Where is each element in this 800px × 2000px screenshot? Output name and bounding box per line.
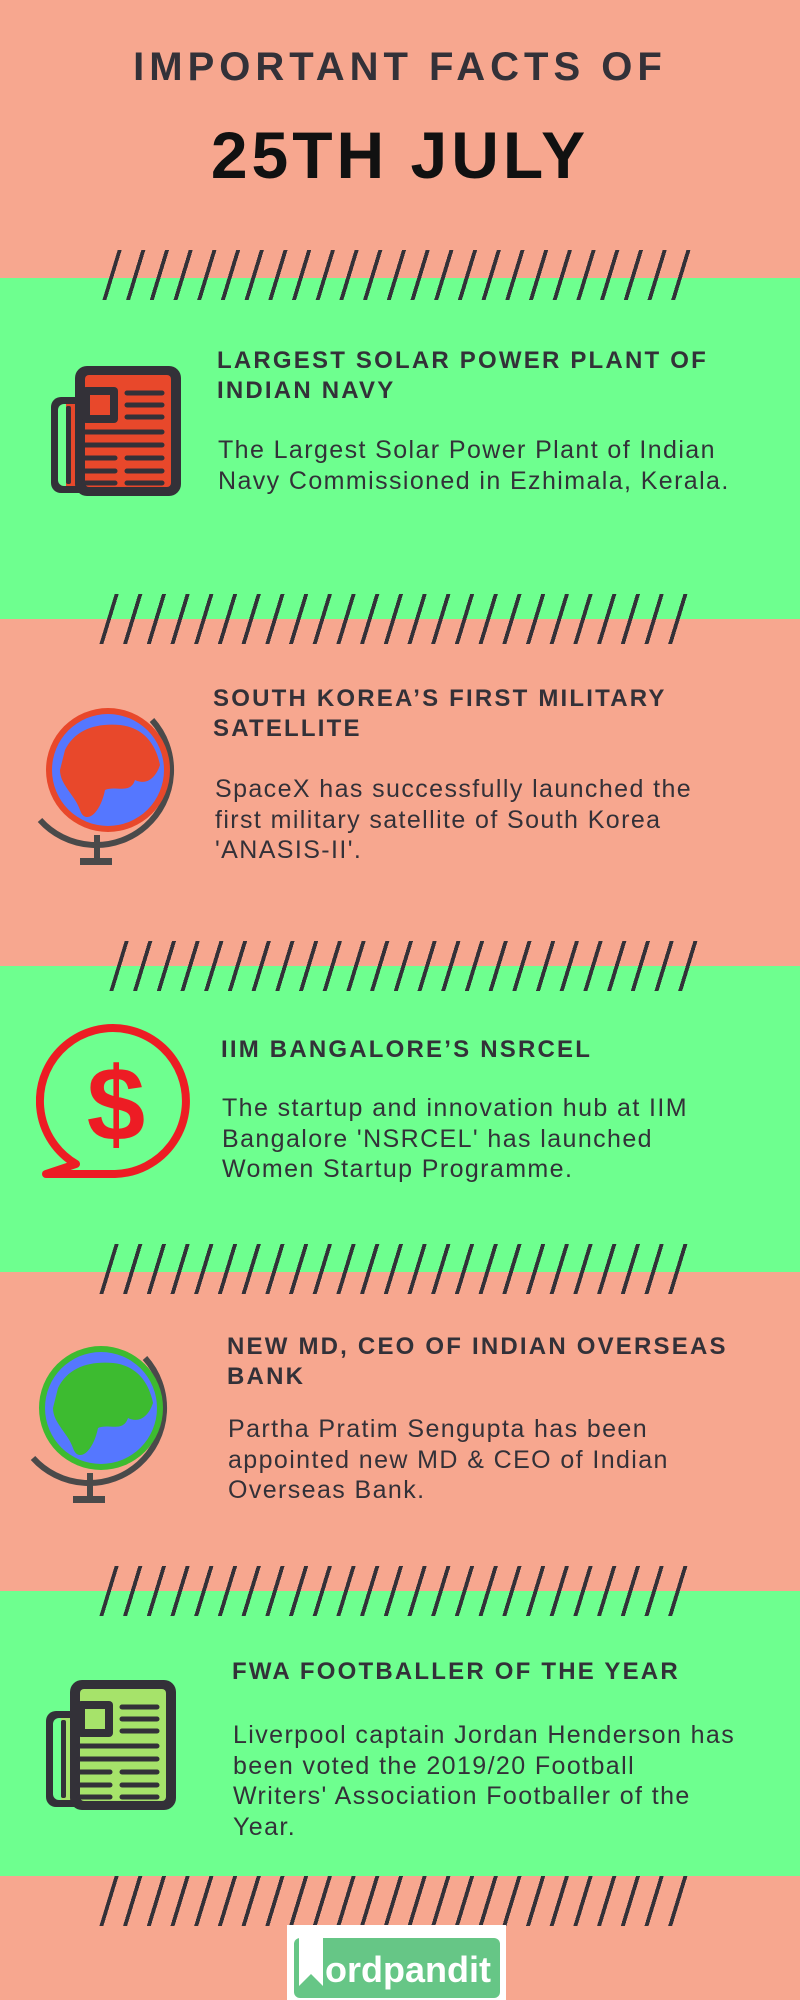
heading 2: SATELLITE [213,715,362,742]
heading 2 [213,685,667,742]
heading 5: FWA FOOTBALLER OF THE YEAR [232,1658,680,1685]
body 4: Partha Pratim Sengupta has been [228,1415,648,1443]
body 2: 'ANASIS-II'. [215,836,362,864]
heading 4: BANK [227,1363,305,1390]
band: fact 2 [0,619,800,966]
slash divider 1 [102,250,710,300]
band: footer [0,1876,800,2000]
band: fact 3 [0,966,800,1272]
body 2: first military satellite of South Korea [215,806,661,834]
body 4: appointed new MD & CEO of Indian [228,1446,669,1474]
icon: dollar speech bubble [36,1024,190,1178]
body 5: Liverpool captain Jordan Henderson has [233,1721,735,1749]
body 5: Writers' Association Footballer of the [233,1782,691,1810]
band: header [0,0,800,278]
icon: globe red [38,708,174,865]
body 4: Overseas Bank. [228,1476,425,1504]
body 5: been voted the 2019/20 Football [233,1752,635,1780]
body 3: The startup and innovation hub at IIM [222,1094,688,1122]
logo: wordpandit [287,1925,506,2000]
body 3: Bangalore 'NSRCEL' has launched [222,1124,653,1152]
heading 4: NEW MD, CEO OF INDIAN OVERSEAS [227,1333,728,1360]
subtitle date: 25TH JULY [211,118,589,192]
slash divider 4 [99,1244,707,1294]
logo: wordpandit: ordpandit [325,1949,491,1990]
heading 2: SOUTH KOREA’S FIRST MILITARY [213,685,667,712]
body 3 [222,1094,688,1183]
body 4 [228,1415,669,1504]
icon: bookmark W [299,1938,323,1986]
body 2: SpaceX has successfully launched the [215,775,692,803]
slash divider 6 [99,1876,707,1926]
title: IMPORTANT FACTS OF [133,45,667,89]
band: fact 1 [0,278,800,619]
icon: globe green [30,1346,168,1503]
heading 1 [217,347,708,404]
icon: newspaper green [46,1680,176,1810]
heading 1: LARGEST SOLAR POWER PLANT OF [217,347,708,374]
heading 3: IIM BANGALORE’S NSRCEL [221,1036,592,1063]
slash divider 3 [109,941,717,991]
slash divider 2 [99,594,707,644]
band: fact 4 [0,1272,800,1591]
icon: dollar speech bubble: $ [87,1046,145,1163]
body 2 [215,775,692,864]
heading 4 [227,1333,728,1390]
body 1: The Largest Solar Power Plant of Indian [218,436,716,464]
body 5: Year. [233,1812,296,1840]
body 3: Women Startup Programme. [222,1155,573,1183]
heading 1: INDIAN NAVY [217,377,395,404]
band: fact 5 [0,1591,800,1876]
icon: newspaper red [51,366,181,496]
body 5 [233,1721,735,1840]
slash divider 5 [99,1566,707,1616]
body 1: Navy Commissioned in Ezhimala, Kerala. [218,466,730,494]
body 1 [218,436,730,494]
